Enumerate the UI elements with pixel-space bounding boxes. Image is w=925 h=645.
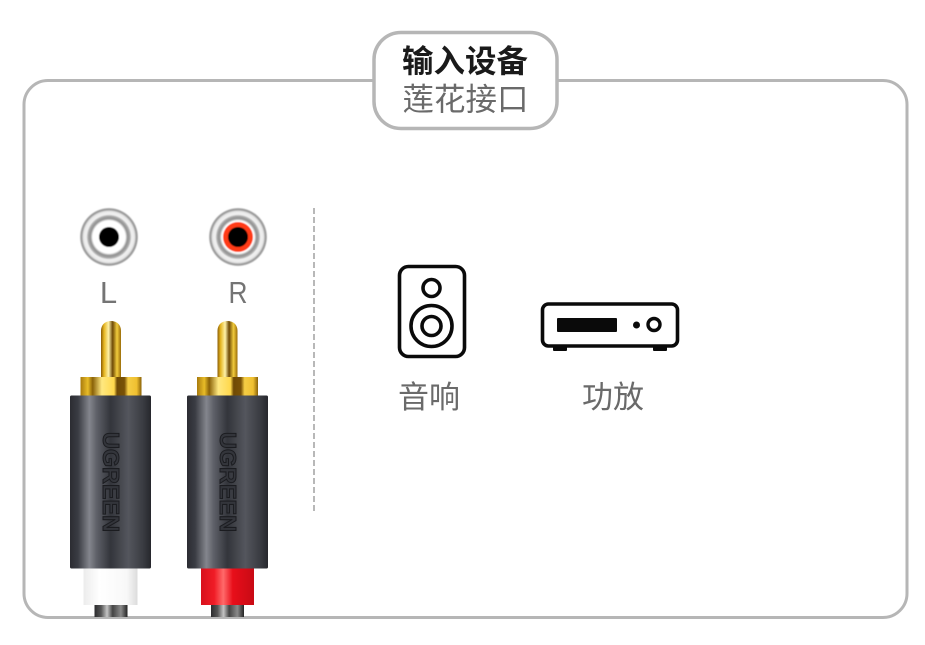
gold pin (101, 321, 121, 379)
left RCA plug (70, 321, 151, 617)
right RCA plug (187, 321, 268, 617)
heading: input device: 输入设备 (402, 43, 528, 79)
panel: input devices frame (24, 80, 907, 618)
icon: speaker (400, 266, 464, 356)
gold collar (197, 377, 258, 396)
badge outline (374, 32, 557, 128)
cable (94, 604, 128, 617)
white strain relief (84, 567, 138, 605)
icon: amplifier (542, 304, 678, 351)
icon: right RCA jack (209, 208, 267, 266)
cable (211, 604, 244, 617)
label: R: R (228, 275, 248, 310)
brand text: UGREEN (98, 432, 124, 532)
label: speaker: 音响 (398, 380, 460, 415)
label: L: L (100, 275, 117, 310)
icon: left RCA jack (80, 208, 138, 266)
red strain relief (201, 567, 254, 605)
brand text: UGREEN (215, 432, 241, 532)
label: amplifier: 功放 (582, 380, 644, 415)
gold pin (218, 321, 238, 379)
subheading: RCA port: 莲花接口 (402, 81, 529, 117)
metal body (187, 396, 268, 568)
heading badge: input device RCA port (374, 32, 557, 128)
gold collar (80, 377, 142, 396)
metal body (70, 396, 151, 568)
